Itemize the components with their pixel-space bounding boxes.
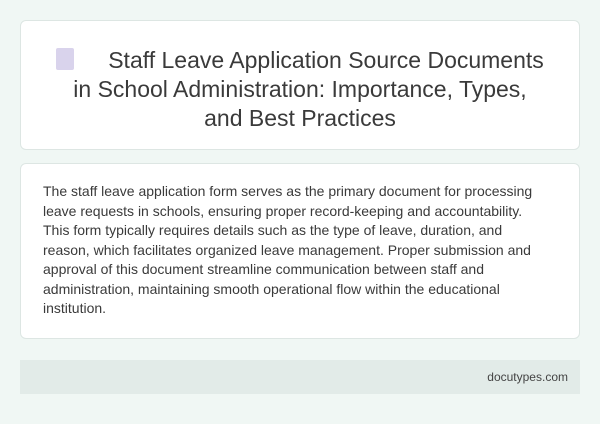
title: Staff Leave Application Source Documents — [108, 47, 544, 73]
footer: docutypes.com — [487, 370, 568, 384]
title: in School Administration: Importance, Types, — [73, 76, 527, 102]
title — [56, 47, 544, 131]
description card — [20, 163, 580, 339]
footer — [20, 360, 580, 394]
header card — [20, 20, 580, 150]
description text: The staff leave application form serves as the primary document for processing leave requests in schools, ensuring proper record-keeping and accountability. This form typically requires details such as the type of leave, duration, and reason, which facilitates organized leave management. Proper submission and approval of this document streamline communication between staff and administration, maintaining smooth operational flow within the educational institution. — [43, 183, 532, 316]
title: and Best Practices — [204, 105, 396, 131]
